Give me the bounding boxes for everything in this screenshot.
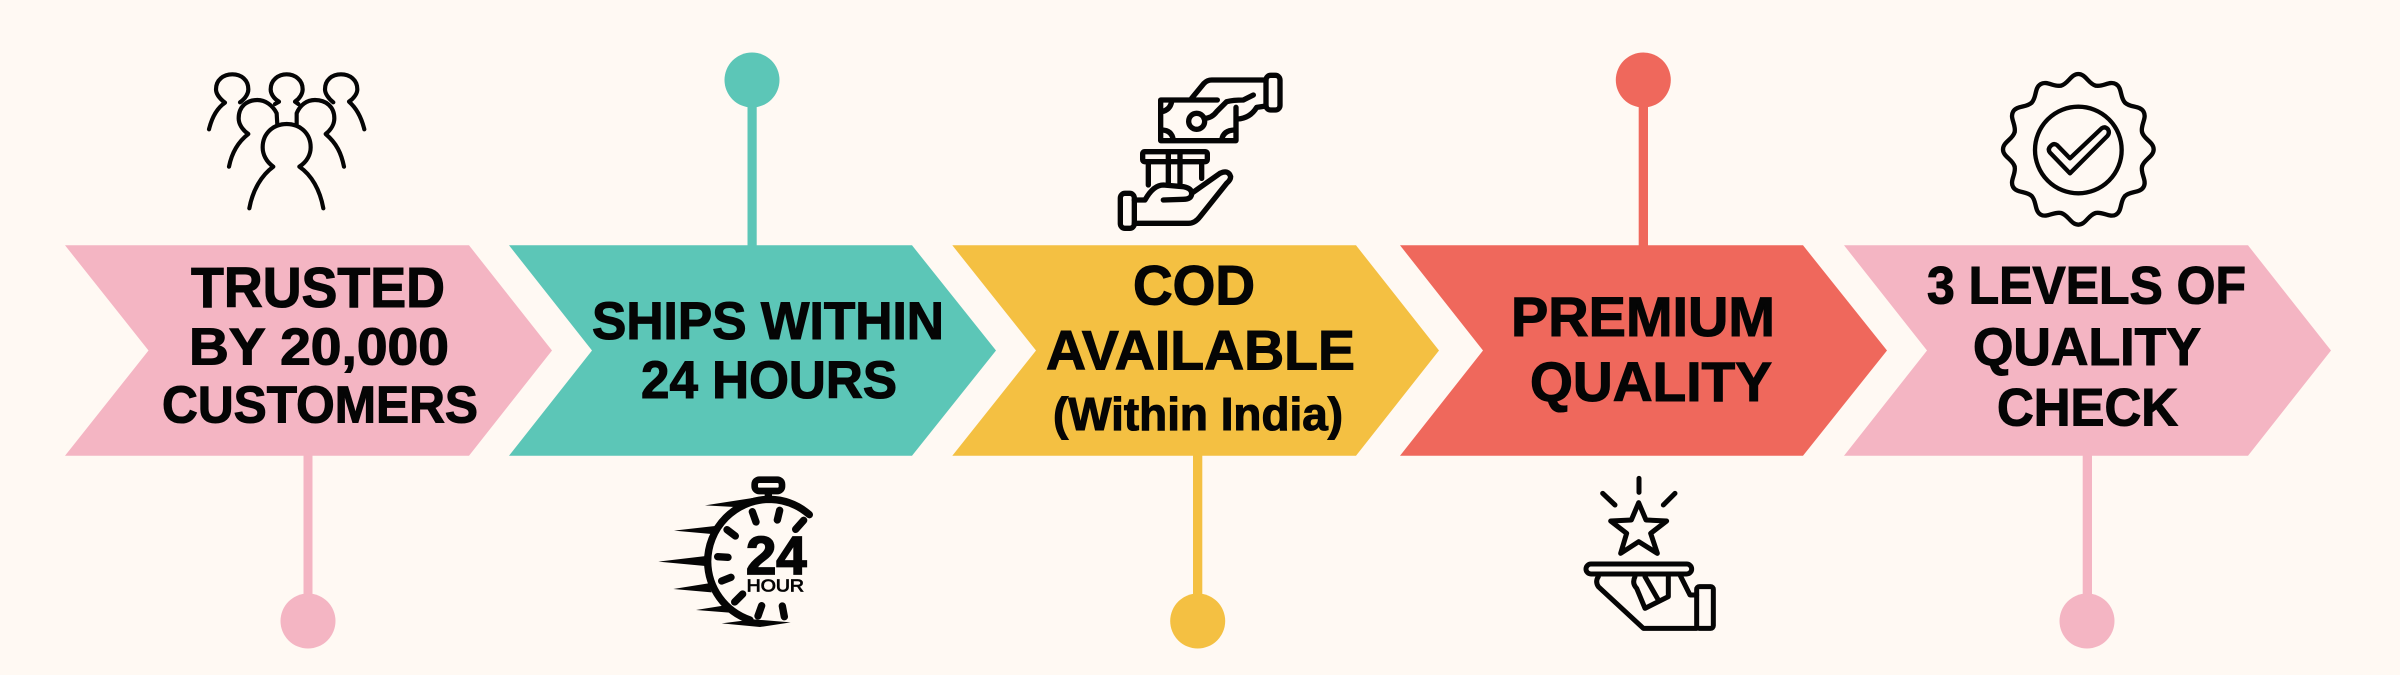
text: premium quality: PREMIUM <box>1511 285 1775 348</box>
text: ships within 24 hours: SHIPS WITHIN <box>592 292 944 351</box>
chevron: yellow <box>952 245 1439 456</box>
chevron: pink <box>1844 245 2331 456</box>
text: trusted by 20,000 customers: BY 20,000 <box>189 318 449 376</box>
text: cod available within india: AVAILABLE <box>1046 318 1355 381</box>
icon: group of people <box>209 74 364 208</box>
text: 3 levels of quality check: 3 LEVELS OF <box>1927 256 2246 315</box>
chevron: pink <box>65 245 552 456</box>
text: trusted by 20,000 customers: CUSTOMERS <box>162 377 478 435</box>
connector pin: teal <box>724 52 780 250</box>
text: premium quality: QUALITY <box>1530 350 1772 413</box>
text: ships within 24 hours: 24 HOURS <box>641 351 897 410</box>
text: premium quality <box>1511 285 1775 413</box>
connector pin: pink <box>2060 450 2114 648</box>
icon: 24 hour stopwatch <box>658 480 809 627</box>
text: 3 levels of quality check <box>1927 256 2246 437</box>
text: cod available within india: (Within India) <box>1053 388 1343 440</box>
connector pin: pink <box>280 450 336 648</box>
connector pin: coral <box>1616 52 1671 250</box>
panel: cod available within india <box>952 75 1439 649</box>
connector pin: yellow <box>1170 450 1225 648</box>
text: cod available within india <box>1046 254 1355 440</box>
icon: 24 hour stopwatch: HOUR <box>747 576 804 596</box>
text: cod available within india: COD <box>1133 254 1255 317</box>
chevron: coral <box>1400 245 1887 456</box>
icon: star on serving tray <box>1586 478 1713 628</box>
icon: cash exchanged for parcel <box>1120 75 1280 228</box>
text: trusted by 20,000 customers: TRUSTED <box>191 256 445 320</box>
panel: premium quality <box>1400 52 1887 628</box>
text: 3 levels of quality check: CHECK <box>1997 378 2178 437</box>
chevron: teal <box>509 245 996 456</box>
icon: quality badge with check mark <box>2003 74 2154 225</box>
text: trusted by 20,000 customers <box>162 256 478 435</box>
panel: 3 levels of quality check <box>1844 74 2331 649</box>
panel: ships within 24 hours <box>509 52 996 627</box>
stopwatch button <box>755 480 782 498</box>
icon: 24 hour stopwatch: 24 <box>746 527 807 586</box>
text: 3 levels of quality check: QUALITY <box>1973 318 2201 377</box>
panel: trusted by 20,000 customers <box>65 74 552 649</box>
text: ships within 24 hours <box>592 292 944 410</box>
